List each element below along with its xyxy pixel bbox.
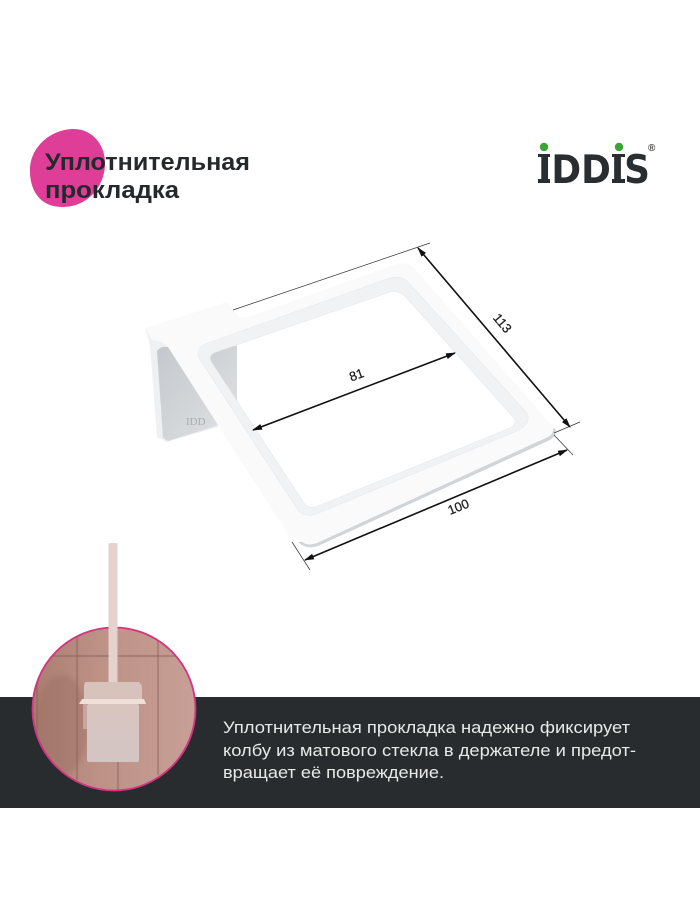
frame body <box>145 263 553 544</box>
dimension 81 arrow <box>253 353 455 430</box>
dimension label 81: 81 <box>347 365 366 384</box>
description text: вращает её повреждение. <box>223 764 444 782</box>
description text: Уплотнительная прокладка надежно фиксирует <box>223 719 630 737</box>
frame thickness edge <box>298 428 556 547</box>
frame rim lip <box>198 277 528 515</box>
tile wall <box>30 625 200 795</box>
brush handle <box>108 543 118 688</box>
heading with pink blob <box>30 129 250 207</box>
glass flask <box>87 704 139 762</box>
holder bracket <box>83 704 87 729</box>
IDDIS logo <box>538 143 656 193</box>
plate engraved logo: IDD <box>186 416 206 428</box>
wall plate <box>145 328 237 442</box>
glass rim top <box>84 682 142 699</box>
infographic canvas <box>0 129 700 808</box>
registered mark: ® <box>648 143 656 154</box>
pink ring <box>32 628 196 790</box>
extension lines <box>233 243 580 570</box>
logo green dots <box>540 143 623 151</box>
dimension 113 arrow <box>418 248 570 427</box>
plate shaded underside <box>157 346 237 441</box>
product drawing: holder frame <box>145 263 556 547</box>
dimension 100 arrow <box>305 450 567 560</box>
logo wordmark: IDDIS <box>538 148 650 193</box>
dark text band <box>0 697 700 808</box>
pink blob <box>30 129 105 207</box>
photo circle: brush holder on tiles <box>30 543 200 795</box>
description text: колбу из матового стекла в держателе и предот- <box>223 742 636 760</box>
tile shadow <box>36 675 88 775</box>
heading text: прокладка <box>45 177 180 204</box>
holder rim <box>79 699 146 704</box>
dimension lines <box>233 243 580 570</box>
dimension label 113: 113 <box>490 310 515 336</box>
heading text: Уплотнительная <box>45 149 250 176</box>
logo letter serifs <box>538 154 625 183</box>
dimension label 100: 100 <box>445 496 471 518</box>
